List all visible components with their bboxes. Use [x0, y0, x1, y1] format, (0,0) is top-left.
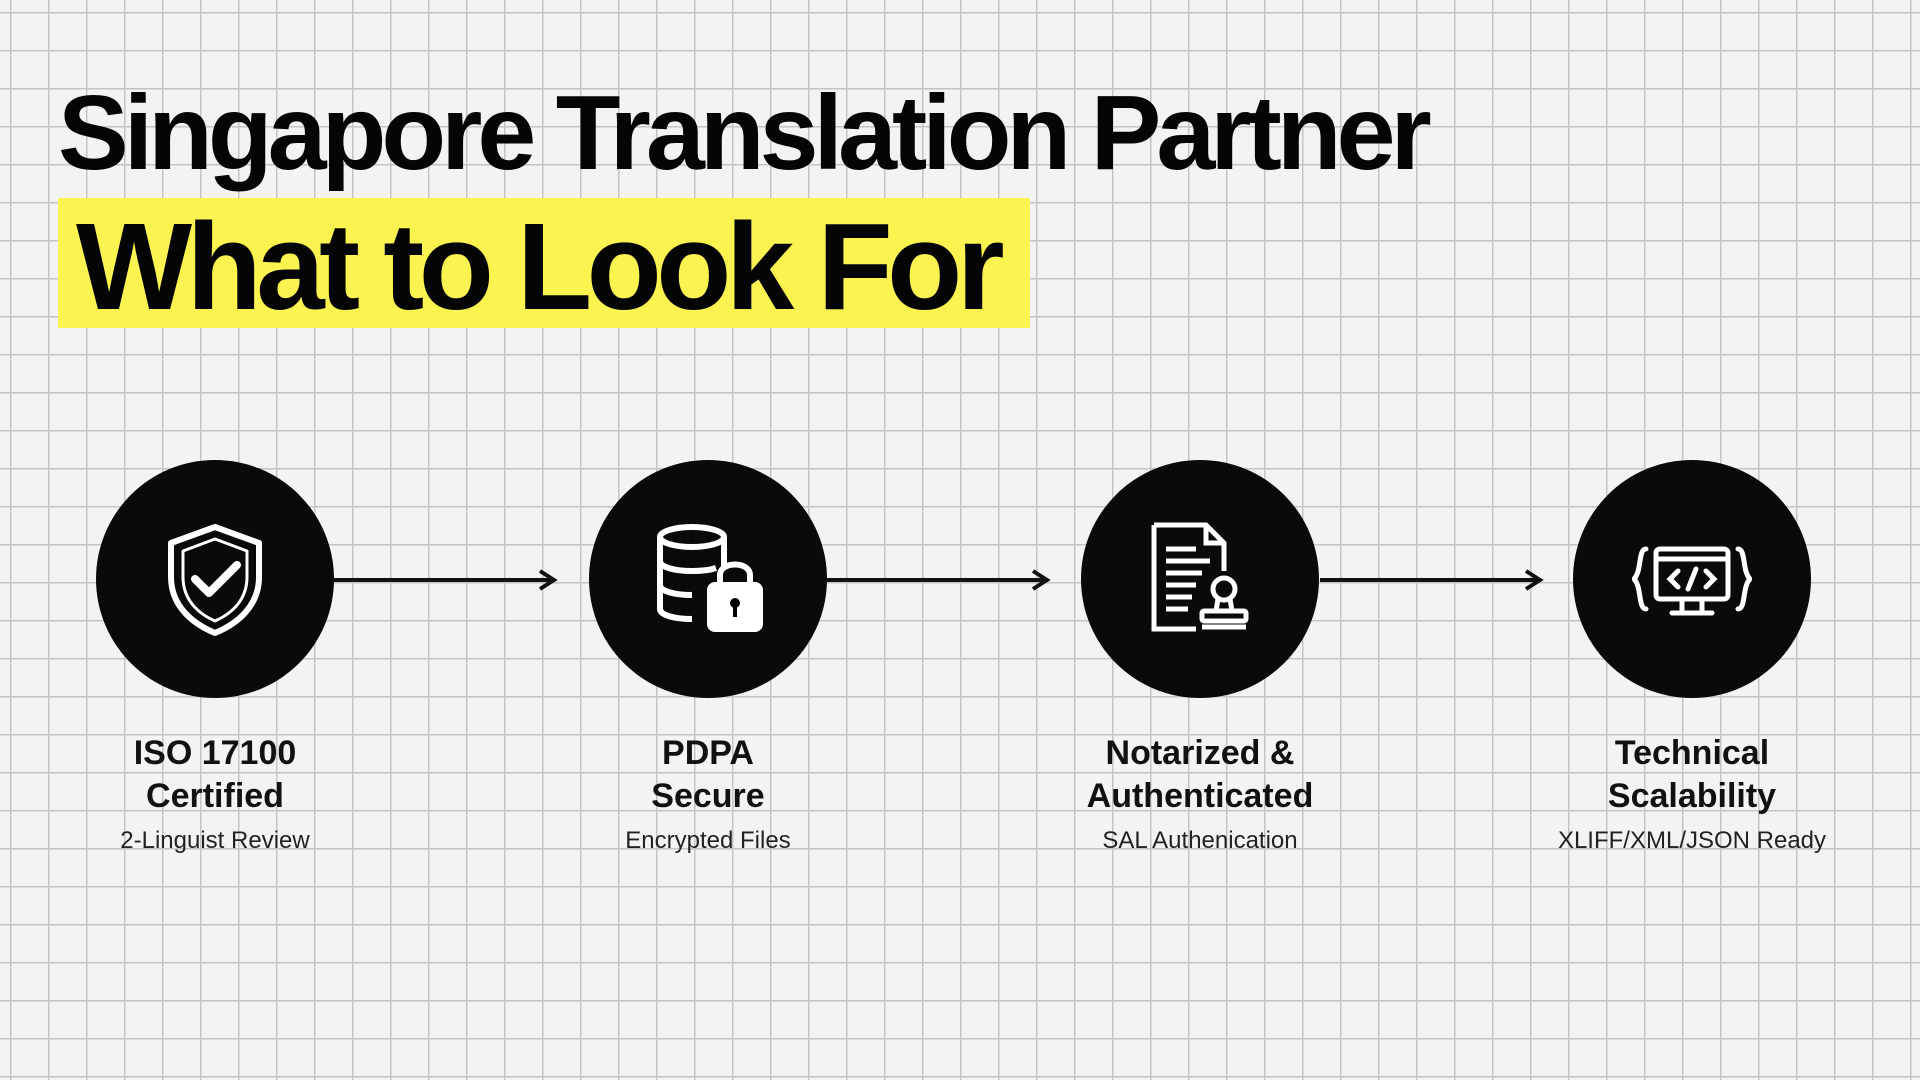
arrow 3 [1320, 569, 1544, 591]
highlight box [58, 198, 1030, 328]
label 3: Authenticated [1087, 777, 1313, 815]
label 4: Technical [1615, 734, 1769, 772]
label 2: Encrypted Files [625, 827, 791, 854]
label 3 [1087, 734, 1313, 854]
label 4: XLIFF/XML/JSON Ready [1558, 827, 1826, 854]
label 3: SAL Authenication [1102, 827, 1298, 854]
icon: code monitor [1573, 460, 1811, 698]
arrow 1 [334, 569, 558, 591]
label 3: Notarized & [1106, 734, 1294, 772]
subtitle heading: What to Look For [76, 199, 999, 336]
arrow 2 [827, 569, 1051, 591]
label 4 [1558, 734, 1826, 854]
label 4: Scalability [1608, 777, 1776, 815]
icon: database lock [589, 460, 827, 698]
label 2: PDPA [662, 734, 754, 772]
title: Singapore Translation Partner [58, 74, 1427, 192]
label 1: Certified [146, 777, 284, 815]
label 1: ISO 17100 [134, 734, 296, 772]
label 1 [120, 734, 310, 854]
label 1: 2-Linguist Review [120, 827, 310, 854]
label 2: Secure [651, 777, 765, 815]
icon: notarized document [1081, 460, 1319, 698]
icon: shield [96, 460, 334, 698]
label 2 [625, 734, 791, 854]
